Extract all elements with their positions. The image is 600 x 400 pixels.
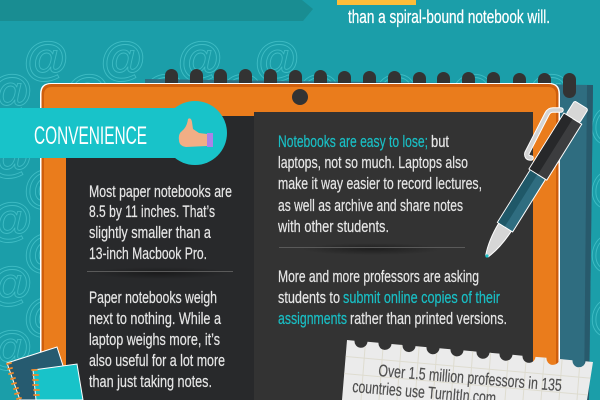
right divider xyxy=(279,243,465,255)
at-sign background pattern: @ xyxy=(255,32,299,84)
left column text: paragraph 1: 13-inch Macbook Pro. xyxy=(89,244,207,263)
at-sign background pattern: @ xyxy=(65,65,109,117)
right column text: paragraph 2: More and more professors are asking xyxy=(278,267,479,286)
section banner xyxy=(0,101,227,165)
right column text: paragraph 2: assignments xyxy=(278,309,347,328)
left column text: paragraph 2: next to nothing. While a xyxy=(89,309,221,328)
back notebook xyxy=(145,79,593,400)
at-sign background pattern: @ xyxy=(142,65,186,117)
left column text: paragraph 2: than just taking notes. xyxy=(89,372,212,391)
camera dot xyxy=(292,89,308,105)
right column text: paragraph 1: with other students. xyxy=(277,217,389,236)
teal notebook spiral xyxy=(32,370,39,395)
at-sign background pattern: @ xyxy=(24,224,68,276)
screen: left panel xyxy=(66,116,254,400)
yellow highlight bar xyxy=(337,0,416,5)
screen: right panel xyxy=(254,112,533,400)
dark notebook spiral xyxy=(7,363,21,399)
icon: thumbs up xyxy=(179,118,213,147)
orange tablet frame xyxy=(40,83,560,400)
torn notebook paper note xyxy=(342,340,593,400)
at-sign background pattern: @ xyxy=(24,160,68,212)
at-sign background pattern: @ xyxy=(219,65,263,117)
spiral rings xyxy=(165,69,551,95)
icon: pen xyxy=(478,99,590,262)
right column text: paragraph 2 xyxy=(278,267,507,328)
right column text: paragraph 1 xyxy=(277,132,482,236)
left column text: paragraph 2: also useful for a lot more xyxy=(89,351,225,370)
small notebooks xyxy=(7,347,83,400)
right column text: paragraph 2: rather than printed versions. xyxy=(350,309,507,328)
pen body xyxy=(478,99,590,262)
right column text: paragraph 1: as well as archive and share notes xyxy=(278,196,463,215)
left column text: paragraph 2 xyxy=(89,288,225,391)
left divider xyxy=(87,267,233,279)
right column text: paragraph 1: laptops, not so much. Laptops also xyxy=(278,153,468,172)
right column text: paragraph 1: but xyxy=(431,132,449,151)
left column text: paragraph 1: 8.5 by 11 inches. That’s xyxy=(89,202,215,221)
at-sign background pattern: @ xyxy=(24,288,68,340)
at-sign background pattern: @ xyxy=(178,32,222,84)
at-sign background pattern: @ xyxy=(24,32,68,84)
pen clip xyxy=(527,110,561,158)
last spiral ring xyxy=(563,73,576,98)
left column text: paragraph 1 xyxy=(89,182,232,263)
left column text: paragraph 1: slightly smaller than a xyxy=(89,223,211,242)
at-sign background pattern: @ xyxy=(527,65,571,117)
pen tip xyxy=(485,254,489,258)
banner title: CONVENIENCE xyxy=(34,122,147,150)
right column text: paragraph 1: Notebooks are easy to lose; xyxy=(278,132,428,151)
at-sign background pattern: @ xyxy=(373,65,417,117)
left column text: paragraph 1: Most paper notebooks are xyxy=(89,182,232,201)
left column text: paragraph 2: Paper notebooks weigh xyxy=(89,288,217,307)
at-sign background pattern: @ xyxy=(450,65,494,117)
dark notebook xyxy=(6,346,64,400)
at-sign background pattern: @ xyxy=(101,32,145,84)
right column text: paragraph 1: make it way easier to record lectures, xyxy=(278,174,482,193)
at-sign background pattern: @ xyxy=(296,65,340,117)
teal notebook xyxy=(33,364,83,400)
right column text: paragraph 2: students to xyxy=(278,288,340,307)
top arrow band xyxy=(0,0,313,21)
left column text: paragraph 2: laptop weighs more, it’s xyxy=(89,330,220,349)
right column text: paragraph 2: submit online copies of their xyxy=(343,288,500,307)
